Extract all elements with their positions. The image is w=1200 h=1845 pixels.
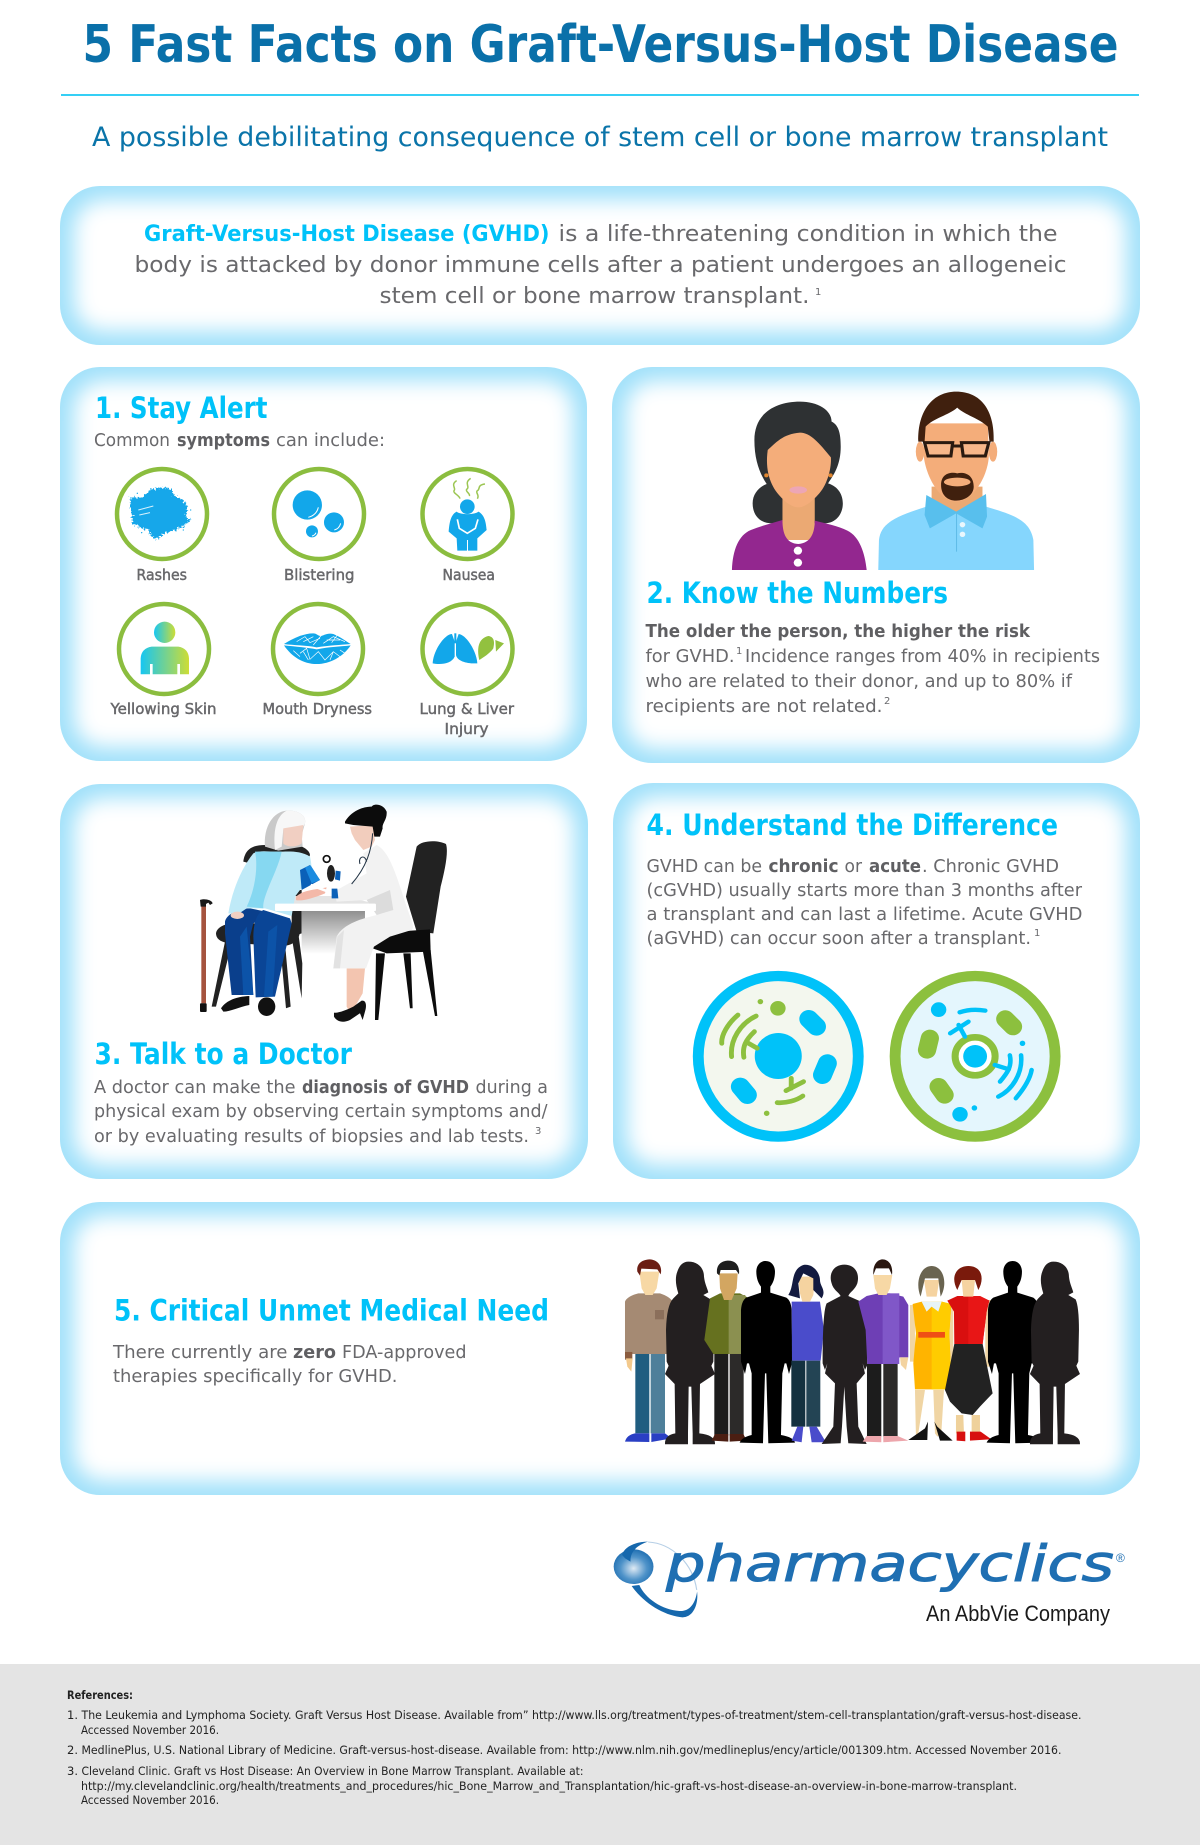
title divider bbox=[61, 94, 1139, 96]
person: woman in yellow dress bbox=[908, 1266, 953, 1441]
person: woman in red top bbox=[945, 1266, 993, 1441]
body text: diagnosis: during a bbox=[476, 1077, 548, 1098]
intro line: common symptoms: Common bbox=[94, 430, 170, 451]
body text: diagnosis: 3 bbox=[535, 1126, 541, 1137]
illustration: woman and man bbox=[732, 392, 1034, 570]
patient bbox=[221, 811, 327, 1016]
intro text: 1 bbox=[815, 287, 821, 298]
reference 1: 1. bbox=[67, 1708, 78, 1722]
heading: know the numbers: 2. Know the Numbers bbox=[646, 576, 948, 610]
panel: 4. understand the difference bbox=[613, 783, 1140, 1179]
man bbox=[878, 392, 1034, 570]
intro text: is a life-threatening condition in which the bbox=[558, 222, 1058, 247]
panel: 3. talk to a doctor bbox=[60, 784, 588, 1179]
person: male silhouette, right bbox=[987, 1261, 1042, 1443]
logo wordmark: pharmacyclics bbox=[665, 1535, 1114, 1593]
illustration: cells bbox=[698, 976, 1055, 1137]
reference 3: Accessed November 2016. bbox=[81, 1793, 219, 1807]
logo tagline: An AbbVie Company bbox=[926, 1601, 1110, 1626]
body text: chronic or acute: GVHD can be bbox=[646, 856, 762, 877]
intro line: common symptoms bbox=[94, 430, 385, 451]
body text: chronic or acute: (aGVHD) can occur soon after a transplant. bbox=[646, 928, 1031, 949]
reference 3 bbox=[67, 1764, 1017, 1807]
body text: numbers: The older the person, the higher the risk bbox=[646, 621, 1031, 642]
icon: blistering bbox=[274, 469, 364, 559]
intro line: common symptoms: can include: bbox=[276, 430, 385, 451]
body text: numbers bbox=[646, 621, 1100, 717]
reference 3: 3. bbox=[67, 1764, 78, 1778]
person: female silhouette, centre bbox=[822, 1265, 867, 1444]
icon: rashes bbox=[117, 469, 207, 559]
body text: numbers: Incidence ranges from 40% in recipients bbox=[745, 646, 1100, 667]
reference 1 bbox=[67, 1708, 1082, 1737]
intro text: stem cell or bone marrow transplant. bbox=[380, 284, 810, 309]
doctor chair bbox=[373, 841, 447, 1020]
intro text: body is attacked by donor immune cells after a patient undergoes an allogeneic bbox=[134, 253, 1066, 278]
patient chair bbox=[212, 845, 310, 1008]
references heading: References: bbox=[67, 1688, 133, 1702]
illustration: doctor and patient bbox=[200, 805, 447, 1022]
woman bbox=[732, 402, 867, 570]
cell: green ring bbox=[895, 976, 1055, 1137]
person: male silhouette bbox=[740, 1261, 795, 1443]
body text: zero approved therapies: FDA-approved bbox=[342, 1342, 466, 1363]
body text: zero approved therapies: zero bbox=[293, 1342, 336, 1363]
body text: zero approved therapies: There currently are bbox=[112, 1342, 288, 1363]
reference 3: Cleveland Clinic. Graft vs Host Disease: An Overview in Bone Marrow Transplant. Available at: bbox=[82, 1764, 584, 1778]
body text: diagnosis: or by evaluating results of biopsies and lab tests. bbox=[94, 1126, 529, 1147]
reference 1: The Leukemia and Lymphoma Society. Graft Versus Host Disease. Available from” http://www.lls.org/treatment/types-of-treatment/stem-cell-transplantation/graft-versus-host-disease. bbox=[81, 1708, 1082, 1722]
body text: diagnosis bbox=[94, 1077, 548, 1147]
reference 2: MedlinePlus, U.S. National Library of Medicine. Graft-versus-host-disease. Available from: http://www.nlm.nih.gov/medlineplus/ency/article/001309.htm. Accessed November 2016. bbox=[82, 1743, 1062, 1757]
body text: diagnosis: physical exam by observing certain symptoms and/ bbox=[94, 1101, 548, 1122]
heading: understand the difference: 4. Understand the Difference bbox=[646, 808, 1058, 842]
body text: zero approved therapies bbox=[112, 1342, 466, 1387]
body text: numbers: who are related to their donor, and up to 80% if bbox=[646, 671, 1073, 692]
panel: 2. know the numbers bbox=[612, 367, 1140, 763]
person: man in green sweater bbox=[704, 1261, 749, 1442]
panel: introduction bbox=[60, 186, 1140, 345]
person: female silhouette bbox=[665, 1262, 715, 1444]
cane bbox=[200, 899, 213, 1012]
heading: stay alert: 1. Stay Alert bbox=[95, 391, 268, 425]
body text: chronic or acute: (cGVHD) usually starts more than 3 months after bbox=[646, 880, 1083, 901]
registered mark: ® bbox=[1116, 1551, 1125, 1565]
reference 3: http://my.clevelandclinic.org/health/treatments_and_procedures/hic_Bone_Marrow_and_Transplantation/hic-graft-vs-host-disease-an-overview-in-bone-marrow-transplant. bbox=[81, 1779, 1017, 1793]
body text: numbers: 2 bbox=[884, 696, 890, 707]
body text: chronic or acute bbox=[646, 856, 1083, 949]
body text: diagnosis: diagnosis of GVHD bbox=[302, 1077, 469, 1098]
symptom labels: Blistering bbox=[284, 566, 354, 584]
body text: chronic or acute: . Chronic GVHD bbox=[922, 856, 1059, 877]
logo mark bbox=[614, 1542, 697, 1617]
panel: 5. critical unmet medical need bbox=[60, 1202, 1140, 1495]
subtitle: A possible debilitating consequence of stem cell or bone marrow transplant bbox=[92, 122, 1108, 153]
intro line: common symptoms: symptoms bbox=[177, 430, 270, 451]
body text: numbers: for GVHD. bbox=[646, 646, 734, 667]
symptom labels: Mouth Dryness bbox=[262, 700, 372, 718]
table shadow and top bbox=[275, 896, 375, 954]
icon: mouth dryness bbox=[273, 604, 363, 694]
icon: yellowing skin bbox=[119, 604, 209, 694]
heading: talk to a doctor: 3. Talk to a Doctor bbox=[94, 1037, 353, 1071]
body text: chronic or acute: a transplant and can last a lifetime. Acute GVHD bbox=[646, 904, 1082, 925]
logo: pharmacyclics bbox=[614, 1535, 1125, 1626]
intro text bbox=[134, 222, 1066, 309]
body text: numbers: 1 bbox=[736, 646, 742, 657]
symptom labels: Nausea bbox=[442, 566, 495, 584]
icon: nausea bbox=[422, 469, 512, 559]
person: woman in blue top bbox=[788, 1265, 826, 1442]
footer: references bbox=[0, 1664, 1200, 1845]
symptom labels: Rashes bbox=[136, 566, 187, 584]
cell: blue ring bbox=[698, 976, 858, 1137]
panel: 1. stay alert bbox=[60, 367, 587, 761]
person: female silhouette, right bbox=[1030, 1262, 1080, 1444]
heading: critical unmet medical need: 5. Critical Unmet Medical Need bbox=[114, 1294, 549, 1328]
body text: chronic or acute: or bbox=[844, 856, 863, 877]
symptom labels: Injury bbox=[444, 720, 489, 738]
body text: numbers: recipients are not related. bbox=[646, 696, 882, 717]
body text: chronic or acute: chronic bbox=[768, 856, 838, 877]
symptom labels bbox=[110, 566, 515, 738]
intro text: Graft-Versus-Host Disease (GVHD) bbox=[144, 222, 550, 247]
illustration: crowd of people bbox=[625, 1259, 1080, 1444]
body text: zero approved therapies: therapies specifically for GVHD. bbox=[113, 1366, 398, 1387]
icon: lung and liver injury bbox=[422, 604, 512, 694]
reference 1: Accessed November 2016. bbox=[81, 1723, 219, 1737]
person: man in brown shirt bbox=[625, 1259, 675, 1442]
body text: chronic or acute: acute bbox=[869, 856, 921, 877]
symptom labels: Lung & Liver bbox=[420, 700, 515, 718]
reference 2: 2. bbox=[67, 1743, 78, 1757]
body text: diagnosis: A doctor can make the bbox=[94, 1077, 296, 1098]
symptom labels: Yellowing Skin bbox=[110, 700, 216, 718]
table edge bbox=[275, 904, 376, 911]
body text: chronic or acute: 1 bbox=[1034, 928, 1040, 939]
person: man in purple shirt bbox=[858, 1259, 908, 1442]
doctor bbox=[311, 805, 447, 1022]
